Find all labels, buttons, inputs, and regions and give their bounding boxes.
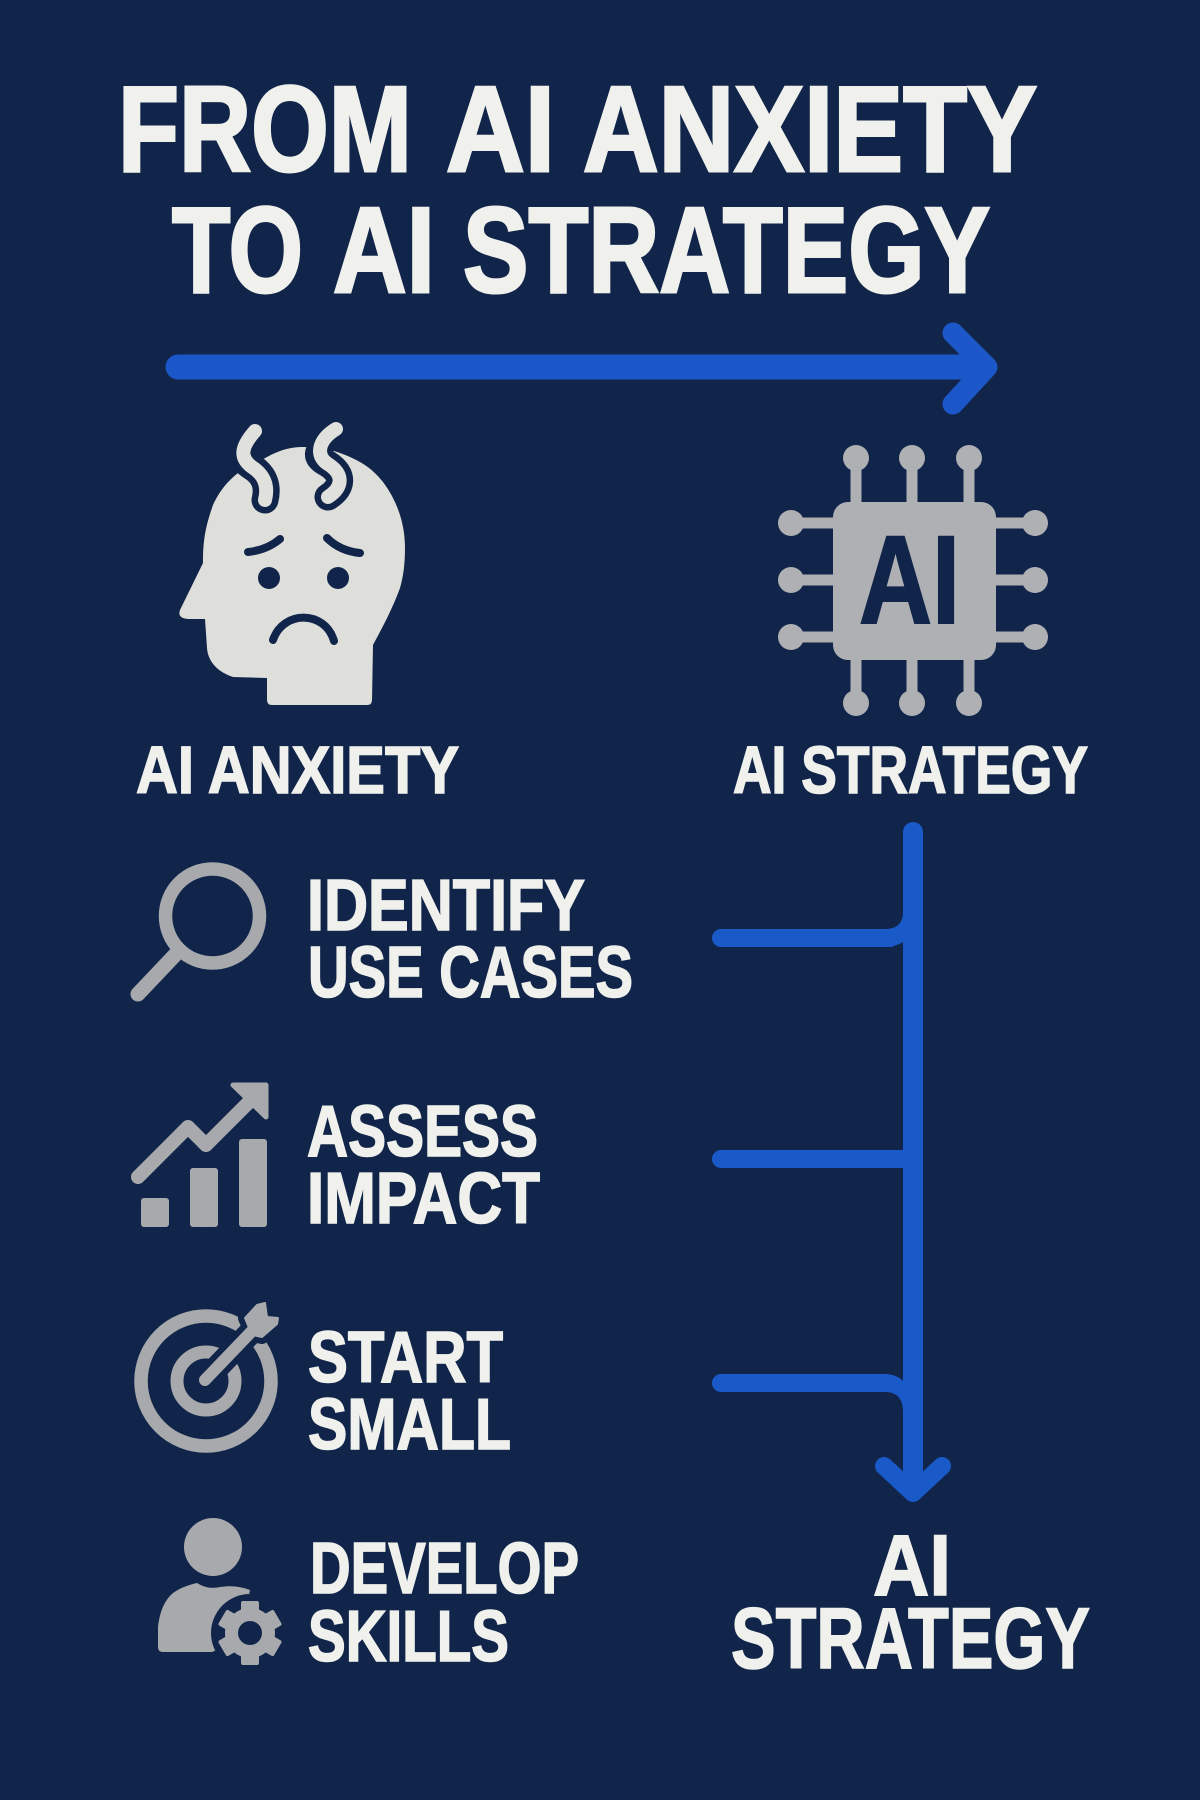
- step: identify use cases: USE CASES: [308, 933, 633, 1013]
- title: ANXIETY: [583, 61, 1037, 197]
- icon: AI chip: [778, 445, 1048, 716]
- icon: growth chart: [138, 1085, 267, 1227]
- arrow: converging vertical flow: [721, 832, 942, 1493]
- title: FROM: [118, 61, 412, 197]
- step: start small: START: [308, 1318, 503, 1398]
- step: assess impact: ASSESS: [307, 1092, 538, 1172]
- step: assess impact: IMPACT: [307, 1159, 540, 1239]
- step: start small: SMALL: [308, 1385, 511, 1465]
- step: identify use cases: [307, 866, 633, 1013]
- step: develop skills: SKILLS: [308, 1597, 509, 1677]
- label: AI strategy: AI STRATEGY: [733, 733, 1088, 808]
- arrow: horizontal transition: [178, 333, 987, 404]
- icon: anxious head: [179, 429, 405, 705]
- icon: magnifying glass: [138, 869, 260, 994]
- step: develop skills: [308, 1529, 579, 1677]
- title: AI: [333, 182, 435, 318]
- title: STRATEGY: [463, 182, 990, 318]
- outcome: AI strategy: STRATEGY: [731, 1591, 1090, 1687]
- icon: AI chip: AI: [859, 511, 960, 650]
- icon: person with gear: [158, 1518, 289, 1672]
- title: [118, 61, 1037, 318]
- step: develop skills: DEVELOP: [310, 1529, 579, 1609]
- step: identify use cases: IDENTIFY: [307, 866, 585, 946]
- icon: target with dart: [141, 1303, 278, 1446]
- step: assess impact: [307, 1092, 540, 1239]
- outcome: AI strategy: [731, 1518, 1090, 1687]
- title: AI: [446, 61, 555, 197]
- step: start small: [308, 1318, 511, 1465]
- title: TO: [172, 182, 303, 318]
- outcome: AI strategy: AI: [873, 1518, 951, 1614]
- label: AI anxiety: AI ANXIETY: [136, 733, 459, 808]
